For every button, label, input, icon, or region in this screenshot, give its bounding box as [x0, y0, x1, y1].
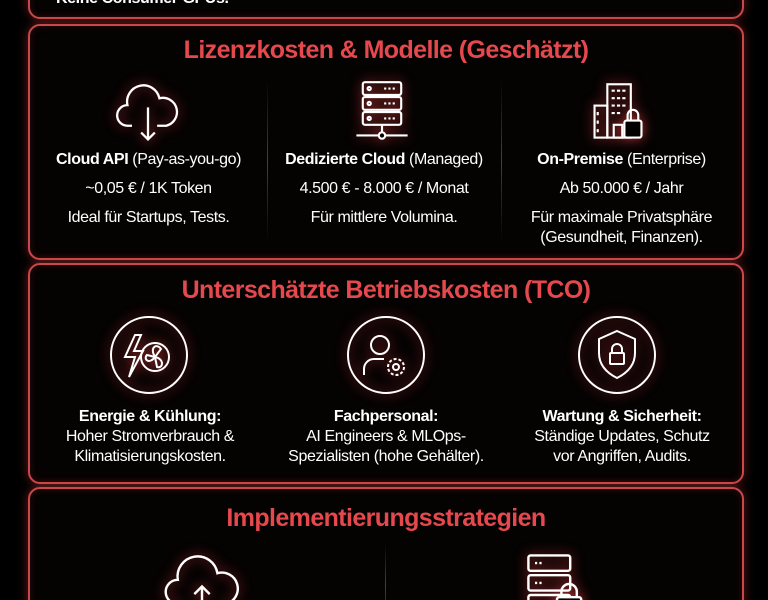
text: on-premise: On-Premise (Enterprise) — [537, 151, 706, 168]
text: energie: Energie & Kühlung: — [79, 408, 221, 425]
text: wartung — [534, 408, 710, 465]
text: fachpersonal: AI Engineers & MLOps- — [306, 428, 466, 445]
panel: lizenzkosten — [28, 24, 744, 260]
panel: implementierung — [28, 487, 744, 600]
icon: building lock — [585, 75, 652, 148]
icon: cloud download — [109, 77, 186, 146]
heading: lizenzkosten: Lizenzkosten & Modelle (Geschätzt) — [184, 36, 588, 64]
icon: personnel — [340, 309, 432, 401]
text: fachpersonal: Spezialisten (hohe Gehälter). — [288, 448, 484, 465]
text: fachpersonal — [288, 408, 484, 465]
text: on-premise — [531, 151, 712, 246]
icon: server — [354, 73, 410, 148]
text: dedizierte cloud: Dedizierte Cloud (Managed) — [285, 151, 483, 168]
text: on-premise: Ab 50.000 € / Jahr — [560, 180, 683, 197]
text: cloud api: Ideal für Startups, Tests. — [68, 209, 229, 226]
text: dedizierte cloud — [285, 151, 483, 226]
text: cloud api: Cloud API (Pay-as-you-go) — [56, 151, 241, 168]
text: cloud api: ~0,05 € / 1K Token — [85, 180, 212, 197]
text: fachpersonal: Fachpersonal: — [334, 408, 438, 425]
icon: cloud upload — [158, 548, 246, 600]
text: wartung: vor Angriffen, Audits. — [553, 448, 691, 465]
text: dedizierte cloud: 4.500 € - 8.000 € / Monat — [300, 180, 468, 197]
panel: betriebskosten — [28, 263, 744, 484]
icon: shield lock — [571, 309, 663, 402]
text: wartung: Ständige Updates, Schutz — [534, 428, 710, 445]
text: cloud api — [56, 151, 241, 226]
icon: energy fan — [103, 309, 195, 402]
panel: top (cut off) — [28, 0, 744, 19]
text: wartung: Wartung & Sicherheit: — [542, 408, 702, 425]
text: energie: Klimatisierungskosten. — [74, 448, 226, 465]
heading: tco: Unterschätzte Betriebskosten (TCO) — [182, 276, 590, 304]
icon: server lock — [519, 546, 591, 600]
text: energie — [66, 408, 234, 465]
heading: implementierung: Implementierungsstrategien — [226, 504, 546, 532]
text: dedizierte cloud: Für mittlere Volumina. — [311, 209, 457, 226]
text: on-premise: (Gesundheit, Finanzen). — [540, 229, 703, 246]
text: on-premise: Für maximale Privatsphäre — [531, 209, 712, 226]
text: energie: Hoher Stromverbrauch & — [66, 428, 234, 445]
